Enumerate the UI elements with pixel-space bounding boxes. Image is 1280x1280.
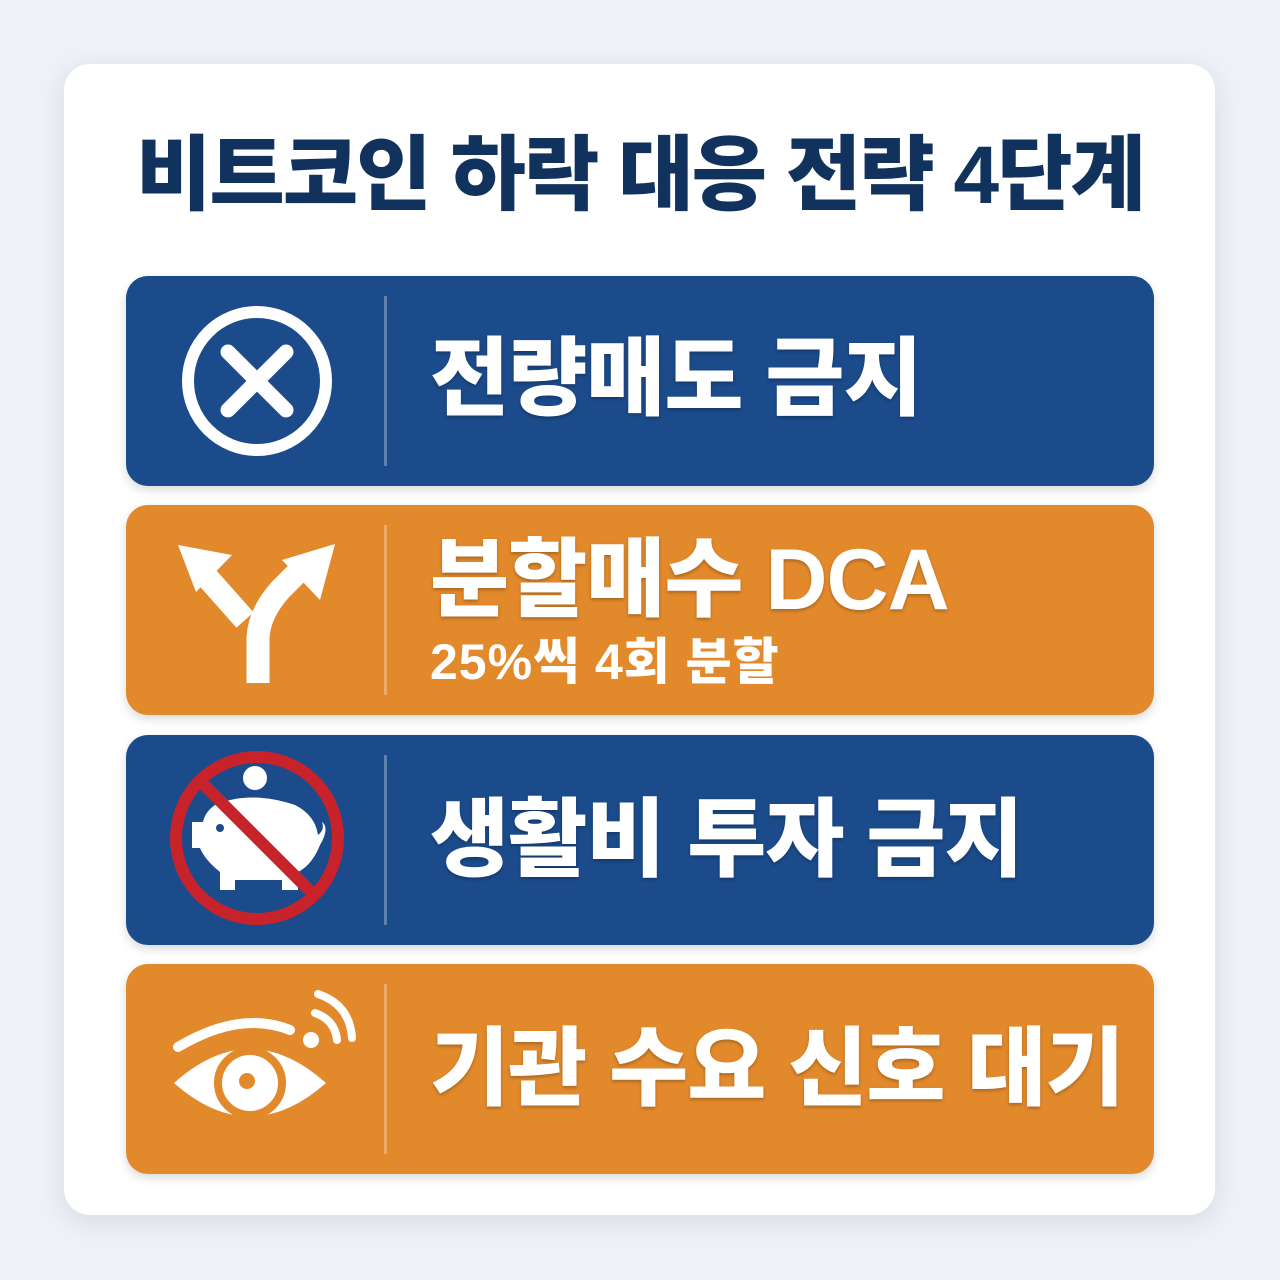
text: 분할매수 DCA [430,532,949,628]
text: 생활비 투자 금지 [430,792,1023,888]
title: 비트코인 하락 대응 전략 4단계 [136,130,1144,221]
panel: 생활비 투자 금지 [126,735,1154,945]
panel: 전량매도 금지 [126,276,1154,486]
subtext: 25%씩 4회 분할 [430,634,780,690]
icon: eye with signal [173,990,356,1115]
panel: 분할매수 DCA [126,505,1154,715]
icon: branching arrows [178,544,335,683]
icon: x circle [182,306,332,456]
text: 기관 수요 신호 대기 [430,1021,1124,1117]
text: 전량매도 금지 [430,331,922,427]
panel: 기관 수요 신호 대기 [126,964,1154,1174]
icon: piggy bank prohibited [170,751,344,925]
